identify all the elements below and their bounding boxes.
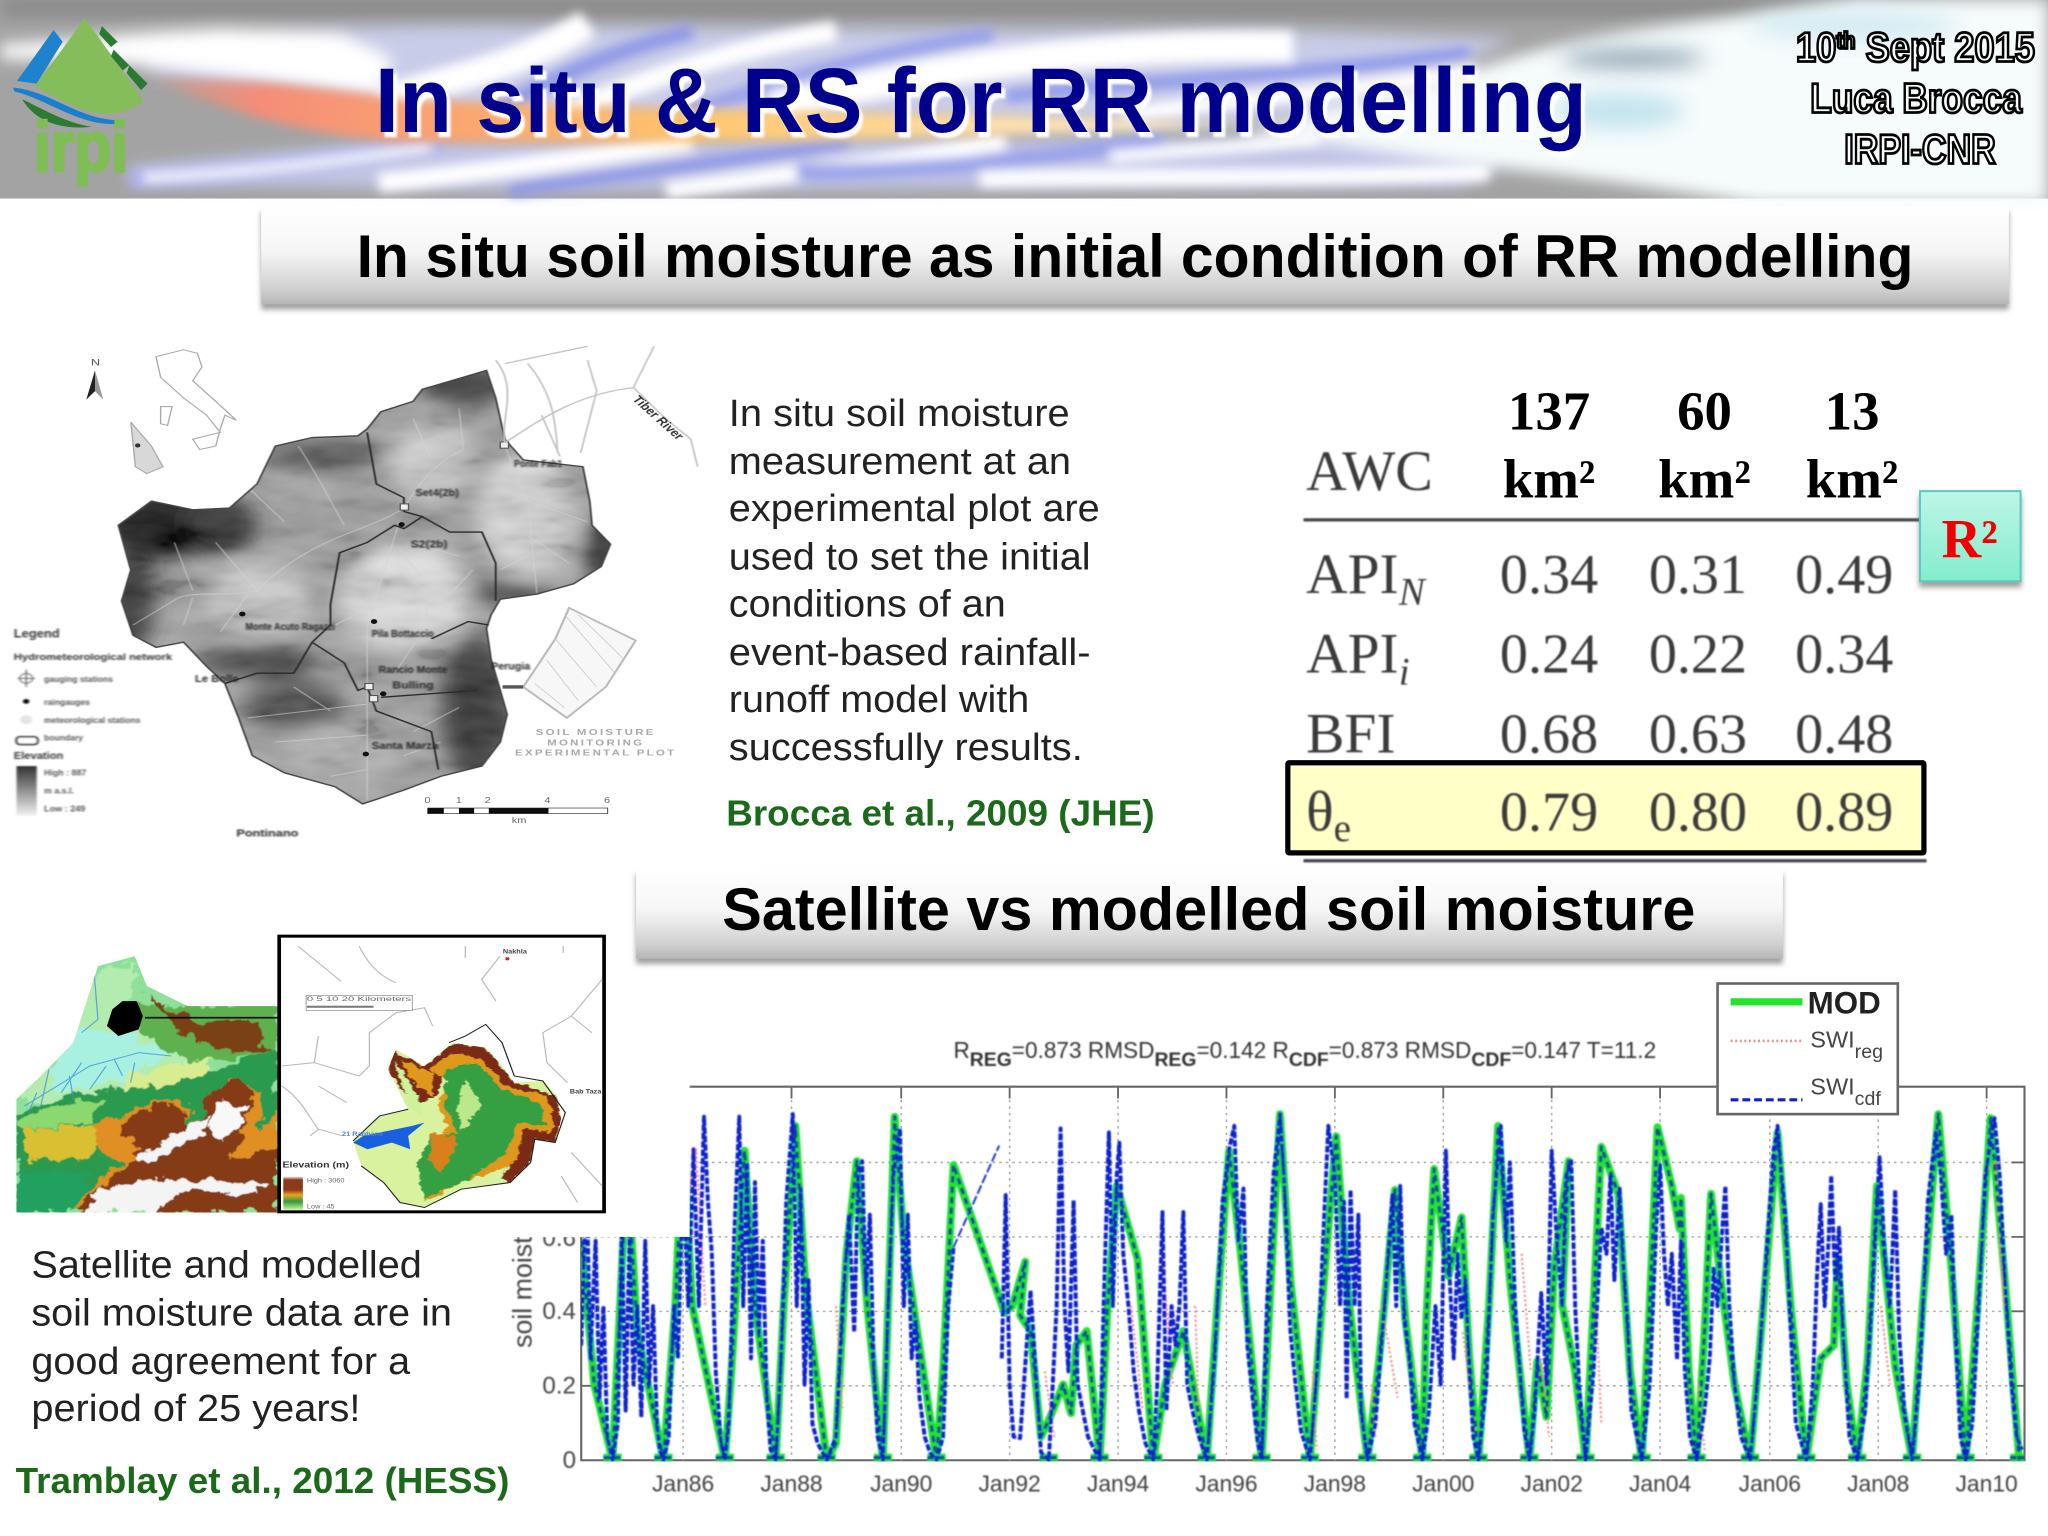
text: in situ description: experimental plot are	[729, 488, 1100, 530]
institute: IRPI-CNR	[1844, 125, 1996, 172]
statistics line: =0.873 RMSD	[1329, 1037, 1471, 1063]
row APIN: 0.31	[1649, 544, 1747, 606]
x axis labels: Jan86	[652, 1471, 714, 1497]
row BFI: 0.63	[1649, 703, 1747, 765]
y axis labels	[511, 1236, 576, 1469]
heading text: In situ soil moisture as initial condition of RR modelling	[357, 223, 1913, 290]
map labels: Ponte Fab1	[514, 457, 562, 469]
map labels: Pontinano	[236, 827, 298, 839]
scale bar	[425, 796, 610, 826]
inset boundary	[353, 1024, 565, 1207]
series: SWI cdf	[581, 1114, 953, 1460]
statistics line: =0.147 T=11.2	[1511, 1037, 1656, 1063]
column headers: 137	[1508, 381, 1590, 442]
inset catchment	[347, 1039, 567, 1209]
row theta: θ	[1306, 781, 1334, 844]
plot caption	[515, 728, 676, 758]
y axis labels: soil moisture	[508, 1198, 538, 1348]
row BFI	[1306, 702, 1893, 765]
row APIi: 0.22	[1649, 624, 1747, 686]
scale bar: 6	[604, 796, 610, 806]
icon: IRPI logo	[13, 18, 148, 186]
row theta: 0.79	[1500, 782, 1598, 844]
x axis labels: Jan94	[1087, 1471, 1149, 1497]
text: satellite description: period of 25 years!	[31, 1388, 360, 1430]
map labels: Bulling	[392, 679, 434, 691]
inset scale bar: 0 5 10 20 Kilometers	[307, 995, 411, 1003]
column headers: 60	[1677, 381, 1732, 442]
highlighted row	[1288, 763, 1924, 853]
statistics line: =0.142 R	[1196, 1037, 1289, 1063]
citation: Tramblay: Tramblay et al., 2012 (HESS)	[16, 1460, 509, 1501]
relief texture	[110, 364, 620, 811]
map labels: Perugia	[491, 660, 530, 672]
text: in situ description: event-based rainfall-	[729, 632, 1091, 674]
statistics line: REG	[1154, 1049, 1196, 1071]
series: SWI cdf overlay on MOD	[581, 1114, 2024, 1460]
regional elevation map	[12, 953, 282, 1216]
citation: Brocca: Brocca et al., 2009 (JHE)	[726, 792, 1155, 833]
x axis labels: Jan10	[1955, 1471, 2018, 1497]
inset place names: Bab Taza	[570, 1089, 602, 1095]
inset: Italy outline	[131, 350, 236, 474]
statistics line: =0.873 RMSD	[1012, 1037, 1154, 1063]
plot caption: SOIL MOISTURE	[536, 728, 656, 738]
inset elevation legend: Low : 45	[307, 1204, 335, 1210]
row BFI: BFI	[1306, 702, 1396, 765]
inset rivers	[282, 946, 602, 1203]
inset place names: Nakhla	[503, 949, 527, 955]
row APIN: N	[1398, 571, 1427, 614]
row APIN: API	[1306, 543, 1399, 606]
scale bar: 2	[485, 796, 491, 806]
y axis labels: 0.6	[542, 1225, 576, 1252]
map labels: Santa Marza	[372, 740, 439, 751]
map legend: m a.s.l.	[44, 787, 74, 796]
inset elevation legend	[282, 1160, 349, 1210]
inset place names: 21 Rabbane	[342, 1131, 383, 1138]
row APIN	[1306, 543, 1893, 614]
catchment relief	[118, 372, 610, 803]
icon: north arrow	[86, 358, 103, 400]
callout: R squared	[1920, 491, 2021, 581]
x axis labels: Jan02	[1521, 1471, 1583, 1497]
mask: white cover over chart corner	[0, 921, 690, 1237]
row APIN: 0.49	[1795, 544, 1893, 606]
inset scale bar	[306, 995, 412, 1010]
row theta: 0.80	[1649, 782, 1747, 844]
row APIN: 0.34	[1500, 544, 1598, 606]
column headers: 13	[1825, 381, 1880, 442]
icon: north arrow: N	[91, 358, 100, 368]
map legend	[14, 628, 173, 816]
chart legend: MOD	[1808, 986, 1881, 1021]
text: satellite description: Satellite and modelled	[31, 1244, 422, 1286]
map legend: High : 887	[44, 769, 86, 778]
map legend: raingauges	[44, 698, 90, 707]
chart legend: SWI	[1810, 1027, 1855, 1053]
x axis labels: Jan88	[760, 1471, 823, 1497]
x axis labels: Jan08	[1847, 1471, 1909, 1497]
map labels: Monte Acuto Ragazzi	[246, 621, 335, 633]
scale bar: km	[512, 816, 526, 826]
gauges	[239, 522, 405, 756]
row APIi: 0.24	[1500, 624, 1598, 686]
map legend: meteorological stations	[44, 716, 140, 726]
map labels: Le Bolle	[195, 672, 239, 684]
map legend: Low : 249	[44, 805, 86, 814]
series: SWI reg	[683, 1149, 2004, 1450]
heading text: Satellite vs modelled soil moisture	[722, 876, 1695, 943]
text: in situ description: used to set the initial	[729, 536, 1091, 578]
map labels: S2(2b)	[411, 538, 447, 550]
map legend: boundary	[44, 734, 84, 743]
row BFI: 0.68	[1500, 703, 1598, 765]
catchment inset	[279, 936, 604, 1212]
Tiber River network	[496, 346, 698, 467]
x axis labels: Jan00	[1412, 1471, 1474, 1497]
x axis labels: Jan96	[1195, 1471, 1258, 1497]
text: in situ description: runoff model with	[729, 679, 1029, 721]
date: th	[1836, 27, 1856, 53]
x axis labels: Jan06	[1739, 1471, 1801, 1497]
text: satellite description: good agreement for a	[31, 1341, 411, 1383]
logo wordmark: irpi	[34, 107, 128, 186]
column headers: km²	[1806, 449, 1898, 510]
text: in situ description: In situ soil moisture	[729, 393, 1070, 435]
y axis labels: 0.4	[542, 1298, 576, 1325]
series: MOD	[581, 1114, 2024, 1460]
map labels: Rancio Monte	[379, 664, 448, 676]
text: in situ description: conditions of an	[729, 583, 1006, 625]
map legend: gauging stations	[44, 675, 113, 684]
series lines	[581, 1114, 2024, 1460]
map legend: Elevation	[14, 750, 63, 761]
section heading: satellite	[636, 869, 1783, 959]
row BFI: 0.48	[1795, 703, 1893, 765]
row theta: 0.89	[1795, 782, 1893, 844]
scale bar: 0	[425, 796, 431, 806]
plot caption: EXPERIMENTAL PLOT	[515, 749, 676, 758]
column headers: km²	[1503, 449, 1595, 510]
row APIi: API	[1306, 623, 1399, 686]
row APIi	[1306, 623, 1893, 693]
column headers	[1503, 381, 1898, 510]
map: experimental catchment	[14, 346, 698, 839]
table: R2 by soil moisture index: AWC	[1306, 440, 1433, 503]
maps: study region	[12, 936, 604, 1216]
section heading: in situ	[261, 206, 2009, 304]
statistics line: CDF	[1471, 1049, 1511, 1071]
header banner	[0, 0, 2048, 204]
plot frame	[581, 1087, 2024, 1460]
x axis labels: Jan92	[979, 1471, 1041, 1497]
date: 10	[1796, 23, 1842, 70]
row theta	[1306, 781, 1893, 850]
inset place names	[342, 949, 602, 1138]
chart: satellite vs modelled soil moisture	[508, 984, 2024, 1497]
scale bar: 1	[456, 796, 462, 806]
statistics line: CDF	[1289, 1049, 1329, 1071]
title: In situ & RS for RR modelling	[375, 50, 1587, 152]
row theta: e	[1334, 807, 1351, 850]
x axis labels: Jan90	[870, 1471, 932, 1497]
chart legend	[1718, 984, 1898, 1114]
x axis labels: Jan98	[1304, 1471, 1366, 1497]
text: in situ description: measurement at an	[729, 441, 1071, 483]
plot caption: MONITORING	[547, 739, 644, 748]
text: satellite description: soil moisture data are in	[31, 1293, 452, 1335]
catchment locator	[107, 1001, 279, 1036]
statistics line: REG	[970, 1049, 1012, 1071]
chart legend: cdf	[1855, 1088, 1881, 1110]
text: in situ description: successfully results.	[729, 727, 1083, 769]
map labels	[195, 457, 562, 839]
row APIi: 0.34	[1795, 624, 1893, 686]
text: in situ description	[729, 393, 1100, 769]
statistics line: R	[953, 1037, 970, 1063]
map legend: Hydrometeorological network	[14, 652, 173, 663]
text: satellite description	[31, 1244, 452, 1430]
presentation details	[1796, 23, 2035, 172]
x axis labels	[652, 1471, 2018, 1497]
experimental plot	[503, 608, 676, 758]
inset elevation legend: High : 3060	[307, 1178, 345, 1184]
label: Tiber River: Tiber River	[629, 394, 687, 442]
inset elevation legend: Elevation (m)	[282, 1160, 349, 1170]
column headers: km²	[1658, 449, 1751, 510]
table: R2 by soil moisture index	[1288, 381, 1927, 861]
chart legend: SWI	[1810, 1074, 1855, 1100]
catchment boundary and sub-basins	[118, 370, 610, 804]
callout: R squared: R²	[1942, 509, 1998, 570]
map labels: Set4(2b)	[415, 487, 459, 499]
map labels: Pila Bottaccio	[372, 628, 434, 640]
y axis labels: 0.2	[542, 1373, 576, 1400]
chart legend: reg	[1855, 1041, 1883, 1063]
scale bar: 4	[544, 796, 551, 806]
row APIi: i	[1399, 650, 1410, 693]
x axis labels: Jan04	[1629, 1471, 1691, 1497]
y axis labels: 0	[563, 1447, 576, 1474]
map legend: Legend	[14, 628, 60, 640]
